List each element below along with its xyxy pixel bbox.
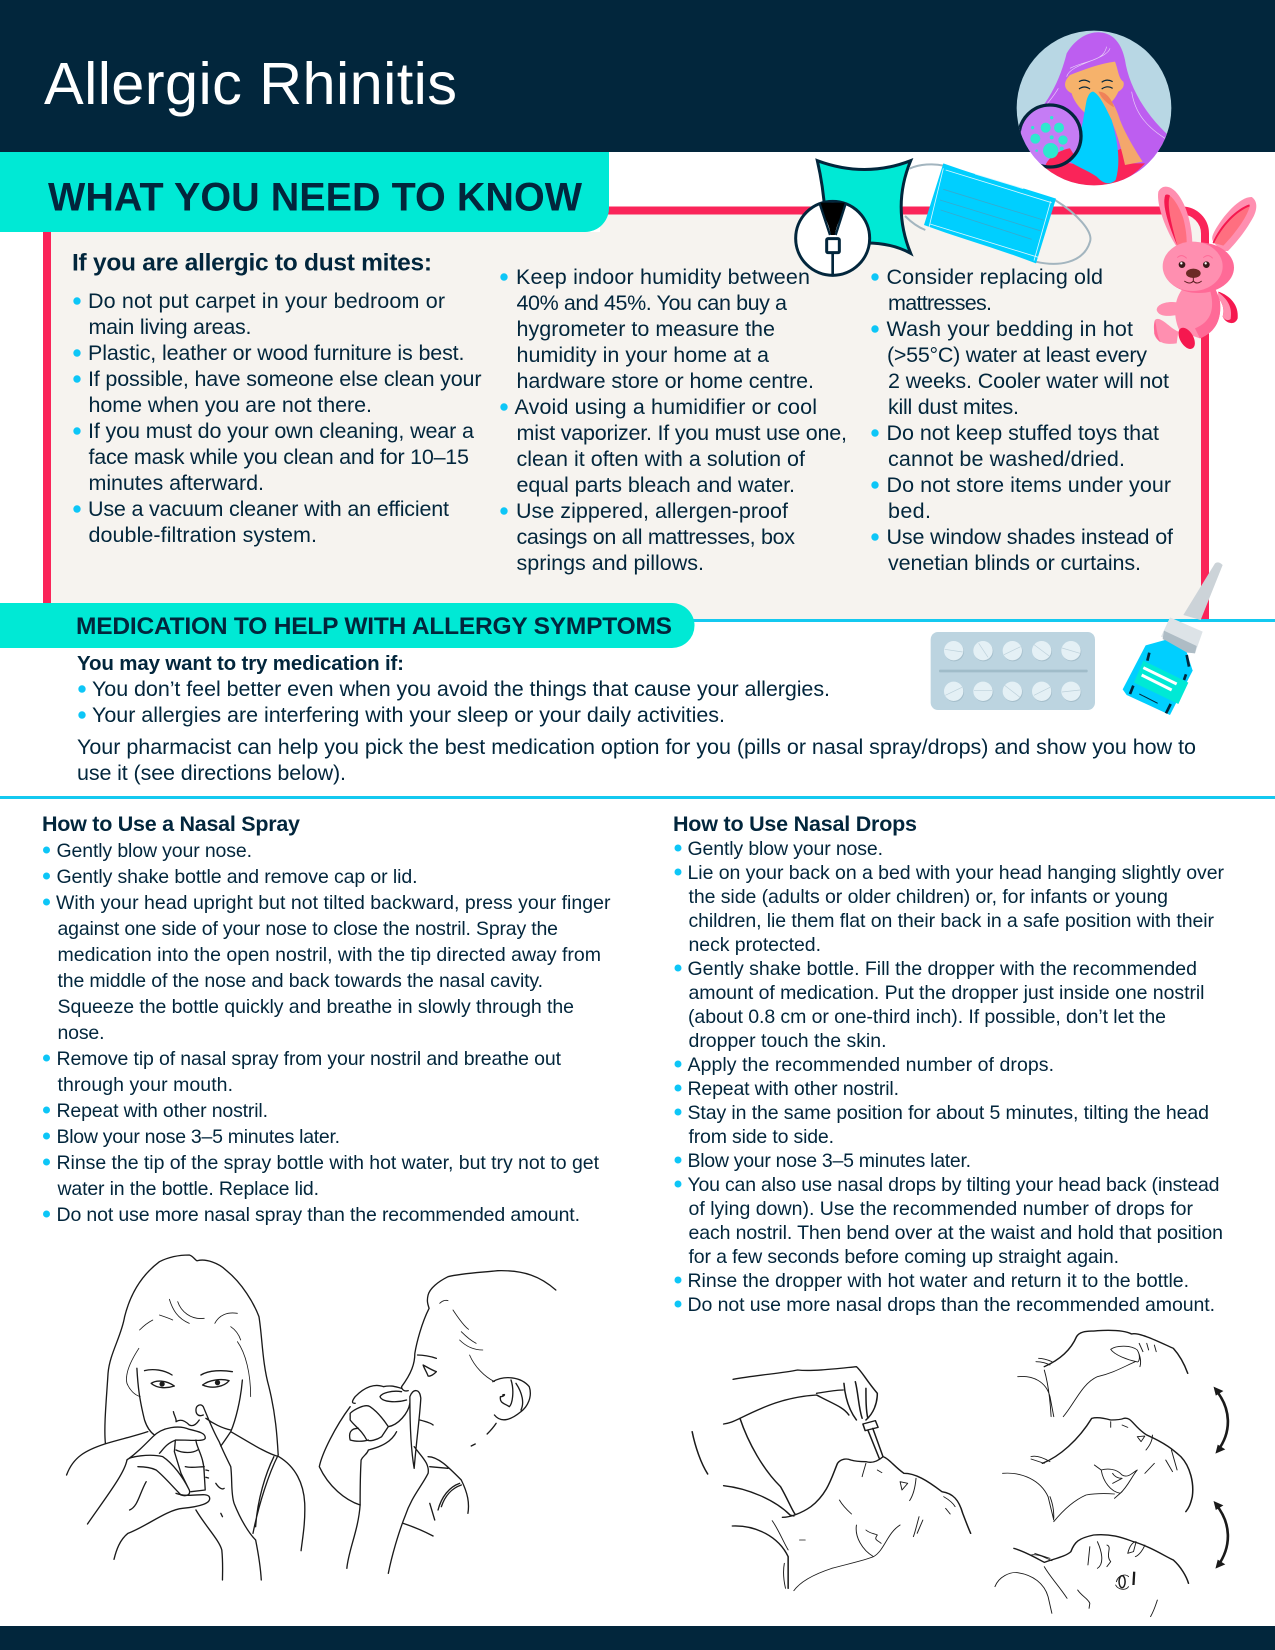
subheading: you may want to try medication: You may want to try medication if: [77, 652, 404, 675]
text block: when to try medication: use it (see directions below). [77, 761, 346, 785]
text block: nasal drops steps: for a few seconds before coming up straight again. [688, 1246, 1119, 1268]
text column 2: hygrometer to measure the [516, 317, 775, 341]
text column 2: springs and pillows. [516, 551, 704, 575]
text block: nasal drops steps: dropper touch the skin. [688, 1030, 886, 1052]
text block: nasal drops steps: Stay in the same position for about 5 minutes, tilting the head [688, 1102, 1209, 1124]
icon: woman blowing nose [1013, 30, 1177, 190]
text column 2: Use zippered, allergen-proof [516, 499, 788, 523]
text column 1: Do not put carpet in your bedroom or [88, 289, 445, 313]
text block: nasal spray steps: Do not use more nasal spray than the recommended amount. [56, 1204, 580, 1226]
title: Allergic Rhinitis [44, 50, 457, 117]
text block: nasal spray steps: With your head upright but not tilted backward, press your finger [56, 892, 611, 914]
text block: when to try medication: Your allergies are interfering with your sleep or your daily activities. [92, 703, 725, 727]
text column 3: Do not store items under your [886, 473, 1171, 497]
text column 3: Do not keep stuffed toys that [886, 421, 1159, 445]
text column 1: If you must do your own cleaning, wear a [88, 419, 474, 443]
text block: nasal drops steps: neck protected. [688, 934, 821, 956]
text column 3: Wash your bedding in hot [886, 317, 1133, 341]
text block: nasal drops steps: Gently shake bottle. Fill the dropper with the recommended [688, 958, 1197, 980]
icon: blister pack of pills [931, 632, 1095, 710]
text column 1: home when you are not there. [88, 393, 372, 417]
text block: nasal drops steps: Lie on your back on a bed with your head hanging slightly over [688, 862, 1224, 884]
text column 3: 2 weeks. Cooler water will not [888, 369, 1169, 393]
text column 3: (>55°C) water at least every [887, 343, 1147, 367]
text block: nasal drops steps: You can also use nasal drops by tilting your head back (instead [688, 1174, 1220, 1196]
heading: dust mites: If you are allergic to dust mites: [72, 250, 432, 276]
text block: nasal drops steps: the side (adults or older children) or, for infants or young [688, 886, 1168, 908]
illustration: woman lying down using nasal drops [692, 1367, 971, 1591]
icon: face mask [905, 163, 1090, 264]
text block: nasal spray steps: Repeat with other nostril. [56, 1100, 268, 1122]
heading: nasal drops: How to Use Nasal Drops [673, 812, 917, 836]
text block: nasal drops steps: Blow your nose 3–5 minutes later. [688, 1150, 971, 1172]
section banner: what you need to know: WHAT YOU NEED TO KNOW [48, 176, 583, 220]
text column 1: Use a vacuum cleaner with an efficient [88, 497, 449, 521]
icon: nasal spray bottle [1123, 562, 1223, 715]
text column 1 [73, 289, 482, 547]
text column 2: Keep indoor humidity between [516, 265, 810, 289]
text block: nasal spray steps: nose. [58, 1022, 104, 1044]
text column 2: hardware store or home centre. [516, 369, 814, 393]
text column 2: 40% and 45%. You can buy a [516, 291, 787, 315]
text column 2: clean it often with a solution of [516, 447, 805, 471]
text column 1: If possible, have someone else clean your [88, 367, 482, 391]
text column 2: mist vaporizer. If you must use one, [516, 421, 847, 445]
text block: nasal drops steps: Apply the recommended number of drops. [688, 1054, 1054, 1076]
text column 1: main living areas. [88, 315, 252, 339]
text block: nasal spray steps: Gently blow your nose. [56, 840, 252, 862]
text block: nasal drops steps: from side to side. [688, 1126, 834, 1148]
text column 3: Consider replacing old [886, 265, 1103, 289]
icon: stuffed bunny [1154, 187, 1256, 352]
illustration: head tilting side to side [995, 1330, 1228, 1617]
text block: nasal spray steps: through your mouth. [58, 1074, 233, 1096]
section banner: what you need to know [0, 152, 609, 232]
text block: nasal spray steps: medication into the open nostril, with the tip directed away from [58, 944, 601, 966]
text column 2: equal parts bleach and water. [516, 473, 795, 497]
text column 3: bed. [888, 499, 931, 523]
footer band [0, 1626, 1275, 1650]
divider line [0, 796, 1275, 799]
text column 3: mattresses. [888, 291, 992, 315]
illustration: woman using nasal spray, front and side views [67, 1255, 556, 1580]
text block: nasal drops steps: Gently blow your nose. [688, 838, 883, 860]
text column 3 [871, 265, 1173, 575]
text block: when to try medication [77, 652, 1196, 785]
text column 1: face mask while you clean and for 10–15 [88, 445, 469, 469]
header band [0, 0, 1275, 152]
heading: nasal spray: How to Use a Nasal Spray [42, 812, 300, 836]
text block: nasal drops steps: of lying down). Use the recommended number of drops for [688, 1198, 1194, 1220]
text column 3: kill dust mites. [888, 395, 1019, 419]
section banner: medication: MEDICATION TO HELP WITH ALLERGY SYMPTOMS [76, 613, 672, 640]
text column 3: Use window shades instead of [886, 525, 1173, 549]
text column 3: venetian blinds or curtains. [888, 551, 1141, 575]
icon: pillow with zipper [796, 161, 911, 275]
text block: when to try medication: Your pharmacist can help you pick the best medication option for you (pills or nasal spray/drops) and show you how to [77, 735, 1196, 759]
text block: nasal drops steps: (about 0.8 cm or one-third inch). If possible, don’t let the [688, 1006, 1166, 1028]
text block: nasal spray steps: Squeeze the bottle quickly and breathe in slowly through the [58, 996, 574, 1018]
section banner: medication [0, 603, 1275, 648]
text block: nasal spray steps: Remove tip of nasal spray from your nostril and breathe out [56, 1048, 562, 1070]
text block: nasal drops steps: Do not use more nasal drops than the recommended amount. [688, 1294, 1215, 1316]
text column 1: minutes afterward. [88, 471, 264, 495]
text column 2: Avoid using a humidifier or cool [514, 395, 817, 419]
text block: nasal spray steps: Blow your nose 3–5 minutes later. [56, 1126, 340, 1148]
text block: nasal drops steps: amount of medication. Put the dropper just inside one nostril [688, 982, 1204, 1004]
text block: nasal spray steps: against one side of your nose to close the nostril. Spray the [58, 918, 558, 940]
text column 2 [500, 265, 847, 575]
text block: nasal spray steps: Rinse the tip of the spray bottle with hot water, but try not to get [56, 1152, 600, 1174]
text block: nasal drops steps: Rinse the dropper with hot water and return it to the bottle. [688, 1270, 1189, 1292]
text block: nasal spray steps [43, 840, 611, 1226]
text column 2: casings on all mattresses, box [516, 525, 795, 549]
arrow: lower head tilt [1214, 1501, 1228, 1569]
text block: nasal drops steps: children, lie them flat on their back in a safe position with their [688, 910, 1214, 932]
text block: nasal spray steps: water in the bottle. Replace lid. [56, 1178, 319, 1200]
text block: when to try medication: You don’t feel better even when you avoid the things that cause your allergies. [92, 677, 830, 701]
arrow: upper head tilt [1214, 1387, 1228, 1454]
text block: nasal drops steps: each nostril. Then bend over at the waist and hold that position [688, 1222, 1223, 1244]
text column 1: double-filtration system. [88, 523, 317, 547]
panel: what you need to know [0, 152, 1205, 620]
text block: nasal spray steps: the middle of the nose and back towards the nasal cavity. [58, 970, 543, 992]
text block: nasal spray steps: Gently shake bottle and remove cap or lid. [56, 866, 418, 888]
text column 3: cannot be washed/dried. [888, 447, 1125, 471]
text column 2: humidity in your home at a [516, 343, 769, 367]
text block: nasal drops steps [674, 838, 1224, 1316]
text column 1: Plastic, leather or wood furniture is best. [88, 341, 464, 365]
text block: nasal drops steps: Repeat with other nostril. [688, 1078, 899, 1100]
